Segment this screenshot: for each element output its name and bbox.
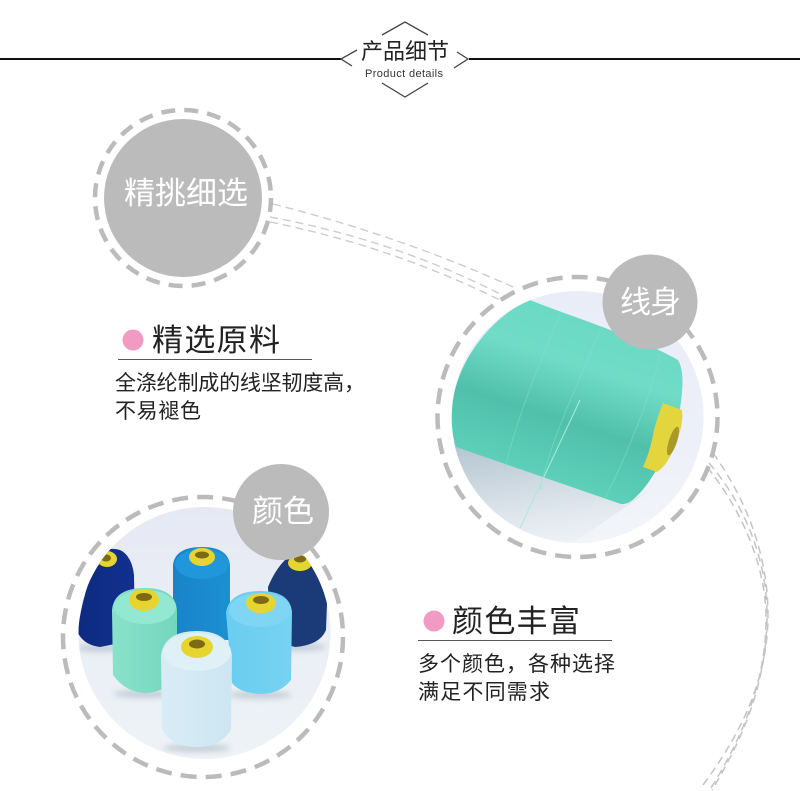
spool body [452, 300, 682, 504]
badge: 线身: 线身 [620, 285, 681, 320]
spool shadows [76, 643, 326, 752]
badge: 精挑细选: 精挑细选 [124, 176, 248, 211]
text block: 颜色丰富 [418, 604, 615, 704]
photo: teal thread spool [438, 277, 718, 557]
spool: navy left [78, 549, 135, 647]
connector: dashed threads curving down the right edge [703, 453, 768, 791]
yellow core [643, 403, 682, 472]
heading: product details: 产品细节 [361, 39, 449, 64]
badge: 精挑细选 [95, 110, 271, 286]
spool: teal [112, 588, 177, 693]
text block: 精选原料: 全涤纶制成的线坚韧度高， [115, 372, 365, 395]
connector: dashed threads from top circle to spool [270, 204, 513, 300]
text block: 精选原料 [115, 323, 365, 423]
text block: 颜色丰富: 满足不同需求 [418, 681, 550, 704]
spool: blue centre [173, 547, 230, 640]
text block: 颜色丰富: 颜色丰富 [452, 604, 580, 639]
spool: pale blue front [161, 631, 232, 747]
spool: dark navy right [268, 555, 327, 647]
photo: assorted colour spools [63, 497, 343, 777]
thread texture [505, 315, 660, 498]
heading: product details: Product details [365, 68, 444, 80]
badge: 颜色 [233, 464, 329, 560]
badge: 颜色: 颜色 [252, 494, 314, 529]
text block: 精选原料: 不易褪色 [115, 400, 201, 423]
text block: 精选原料: 精选原料 [152, 323, 280, 358]
badge: 线身 [602, 254, 698, 350]
loose thread [520, 400, 580, 528]
spool: sky blue [226, 591, 292, 694]
text block: 颜色丰富: 多个颜色，各种选择 [418, 653, 615, 676]
heading: product details [0, 22, 800, 97]
